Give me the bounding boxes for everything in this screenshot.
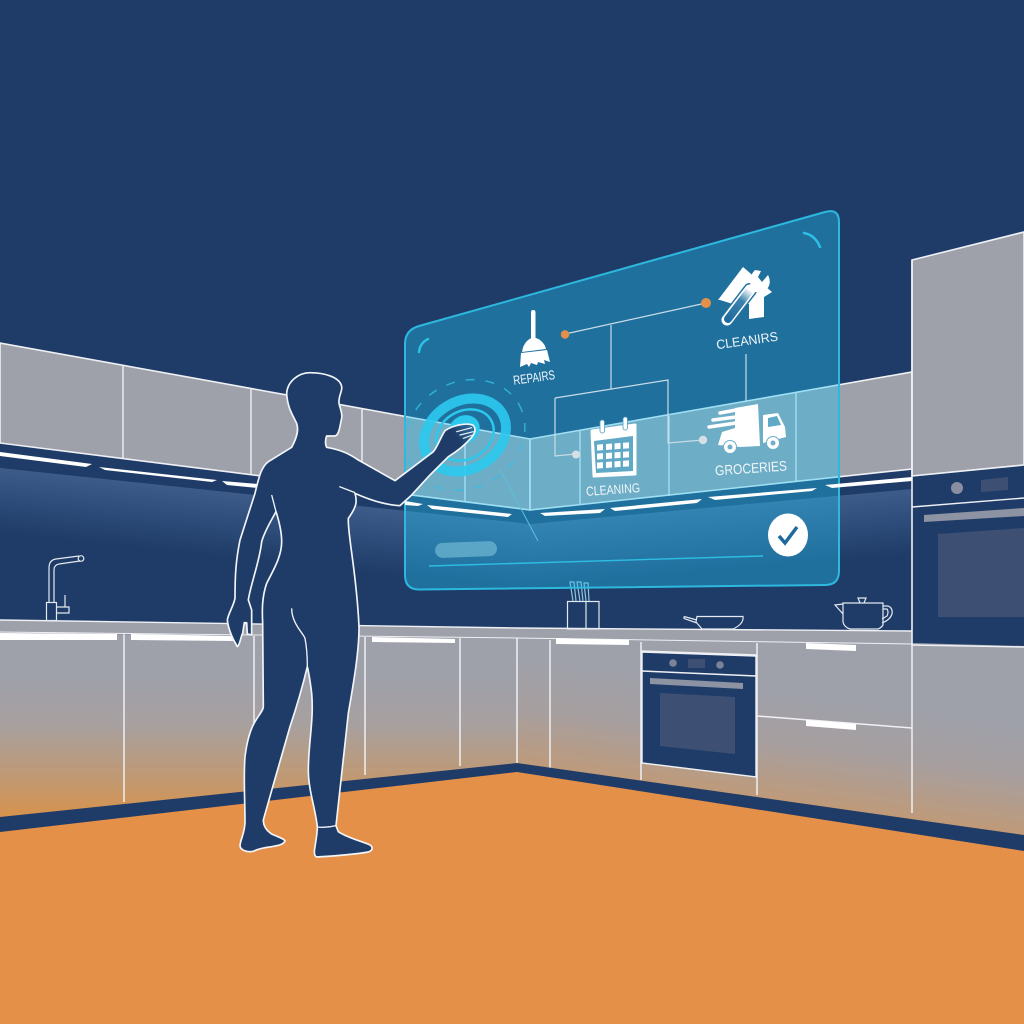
connector lines xyxy=(555,303,746,456)
icon: broom xyxy=(520,310,550,367)
thin diagonal light line xyxy=(500,469,538,541)
backsplash glow under cabinets xyxy=(0,468,912,600)
label: cleanirs: CLEANIRS xyxy=(715,329,779,352)
icon: faucet xyxy=(46,556,84,620)
touch ripple rings xyxy=(385,358,545,512)
label: groceries: GROCERIES xyxy=(715,458,787,478)
glass panel surface xyxy=(405,211,839,590)
tall unit divider line xyxy=(911,260,913,645)
cabinet handles xyxy=(0,633,856,730)
finger lines xyxy=(457,428,473,438)
icon: pan xyxy=(684,616,743,629)
body outline xyxy=(227,373,475,857)
inner body lines xyxy=(272,487,355,827)
icon: delivery truck xyxy=(709,404,786,454)
icon: knife block xyxy=(568,582,599,629)
baseboard xyxy=(0,763,1024,851)
tall cabinet right xyxy=(912,232,1024,476)
floor xyxy=(0,760,1024,1024)
connector nodes xyxy=(561,298,711,458)
progress line xyxy=(429,556,763,566)
person silhouette xyxy=(227,373,475,857)
progress pill xyxy=(435,541,497,558)
lower cabinets xyxy=(0,633,1024,835)
icon: calendar xyxy=(592,417,635,476)
icon: house with wrench xyxy=(718,267,772,320)
countertop xyxy=(0,620,912,644)
label: repairs: REPAIRS xyxy=(512,367,556,388)
under-counter oven xyxy=(642,652,756,777)
upper wall cabinets xyxy=(0,343,912,510)
under-cabinet light strips left xyxy=(0,452,258,488)
panel: holographic glass interface xyxy=(385,211,912,590)
icon: check badge xyxy=(768,514,808,556)
icon: teapot xyxy=(835,598,892,629)
label: cleaning: CLEANING xyxy=(586,480,640,499)
light strips seen through glass xyxy=(405,477,912,517)
corner accents xyxy=(419,233,820,352)
built-in wall oven right xyxy=(912,465,1024,647)
